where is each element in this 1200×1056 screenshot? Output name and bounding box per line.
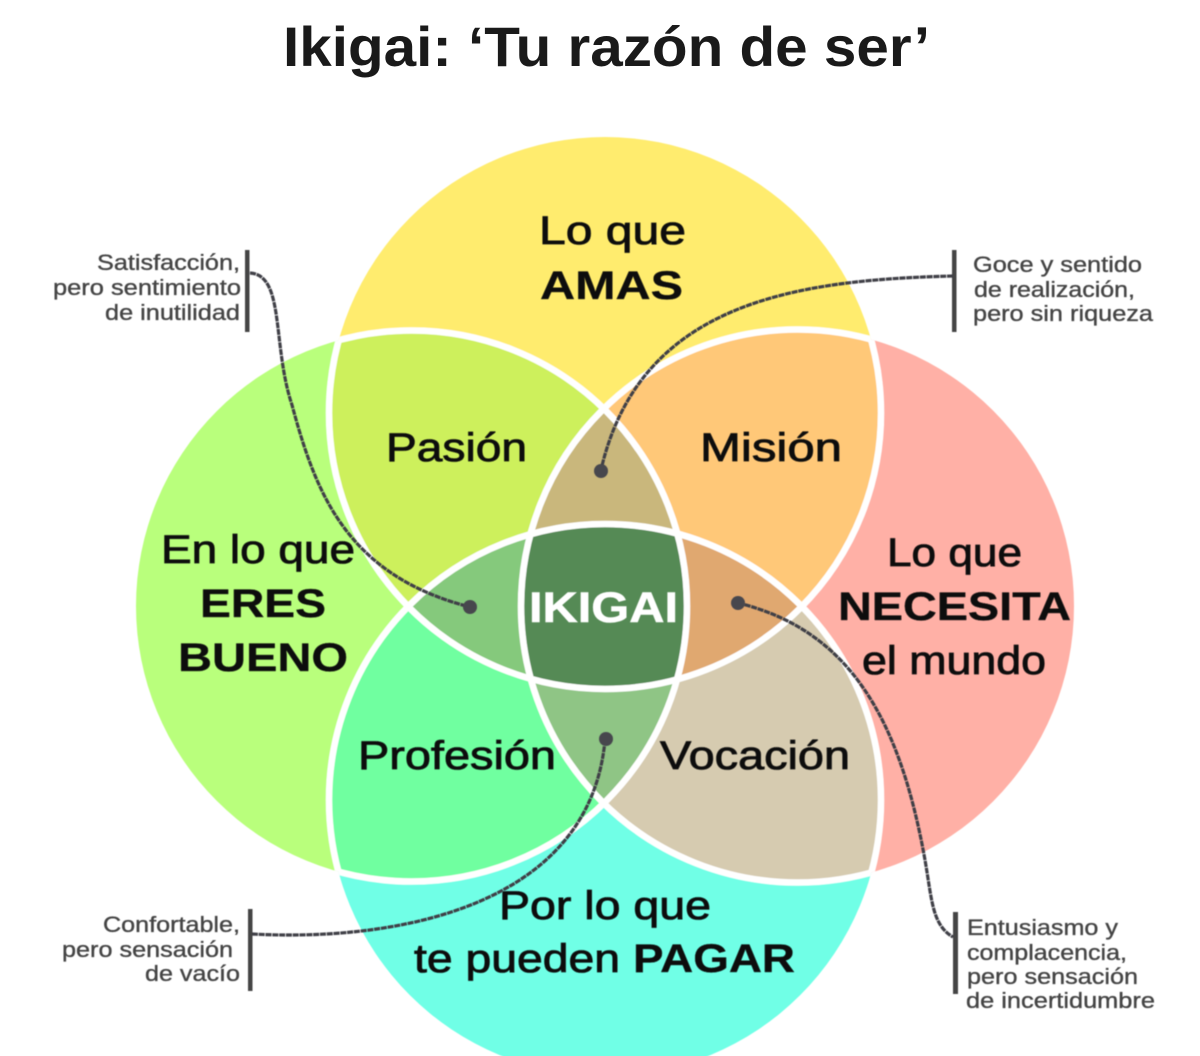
label: por lo que te pueden pagar	[414, 884, 795, 981]
lens: left	[412, 539, 526, 674]
callout: entusiasmo: complacencia,	[967, 940, 1127, 965]
label: lo que necesita el mundo	[838, 531, 1071, 683]
region: pasión	[332, 334, 598, 602]
center: ikigai	[524, 526, 684, 686]
callout: satisfacción	[53, 250, 477, 614]
region: misión	[608, 332, 878, 602]
callout: goce	[594, 250, 1154, 478]
callout: satisfacción: de inutilidad	[105, 300, 240, 325]
callout: confortable: Confortable,	[103, 912, 240, 937]
callout: confortable	[62, 732, 613, 991]
label: lo que amas: AMAS	[540, 264, 683, 308]
lens: bottom	[535, 683, 672, 799]
lens: top	[535, 413, 673, 530]
label: lo que amas	[539, 209, 686, 308]
callout: goce: pero sin riqueza	[973, 301, 1154, 326]
callout: confortable: pero sensación	[62, 937, 233, 962]
callouts	[53, 250, 1155, 1013]
white circle outlines	[325, 326, 885, 886]
label: profesión: Profesión	[358, 734, 556, 778]
label: lo que amas: Lo que	[539, 209, 686, 253]
circle: lo que amas	[329, 137, 881, 689]
label: por lo que te pueden pagar: PAGAR	[633, 937, 795, 981]
callout: goce: de realización,	[974, 277, 1135, 302]
callout: entusiasmo: Entusiasmo y	[967, 915, 1118, 940]
label: por lo que te pueden pagar: te pueden	[414, 937, 620, 981]
label: vocación: Vocación	[660, 734, 850, 778]
label: pasión: Pasión	[386, 426, 527, 470]
title: Ikigai: ‘Tu razón de ser’	[283, 15, 930, 78]
circle: lo que necesita el mundo	[521, 330, 1074, 882]
venn diagram	[136, 137, 1074, 1056]
lens: right	[682, 538, 797, 675]
label: en lo que eres bueno	[161, 528, 355, 680]
callout: satisfacción: pero sentimiento	[53, 275, 241, 300]
label: por lo que te pueden pagar: Por lo que	[499, 884, 711, 928]
label: lo que necesita el mundo: el mundo	[862, 639, 1046, 683]
circle labels	[161, 209, 1071, 981]
label: en lo que eres bueno: En lo que	[161, 528, 355, 572]
label: en lo que eres bueno: ERES	[200, 582, 326, 626]
callout: satisfacción: Satisfacción,	[97, 250, 240, 275]
label: lo que necesita el mundo: Lo que	[887, 531, 1022, 575]
region: profesión	[332, 611, 600, 879]
callout: confortable: de vacío	[145, 961, 240, 986]
label: en lo que eres bueno: BUENO	[178, 636, 348, 680]
callout: entusiasmo	[731, 596, 1155, 1013]
region: vocación	[608, 611, 878, 880]
callout: entusiasmo: de incertidumbre	[966, 988, 1155, 1013]
callout: entusiasmo: pero sensación	[967, 964, 1138, 989]
label: ikigai: IKIGAI	[529, 584, 678, 632]
callout: goce: Goce y sentido	[973, 252, 1142, 277]
circle: en lo que eres bueno	[136, 330, 687, 882]
circle: por lo que te pueden pagar	[329, 524, 881, 1056]
label: lo que necesita el mundo: NECESITA	[838, 585, 1071, 629]
label: misión: Misión	[700, 426, 842, 470]
